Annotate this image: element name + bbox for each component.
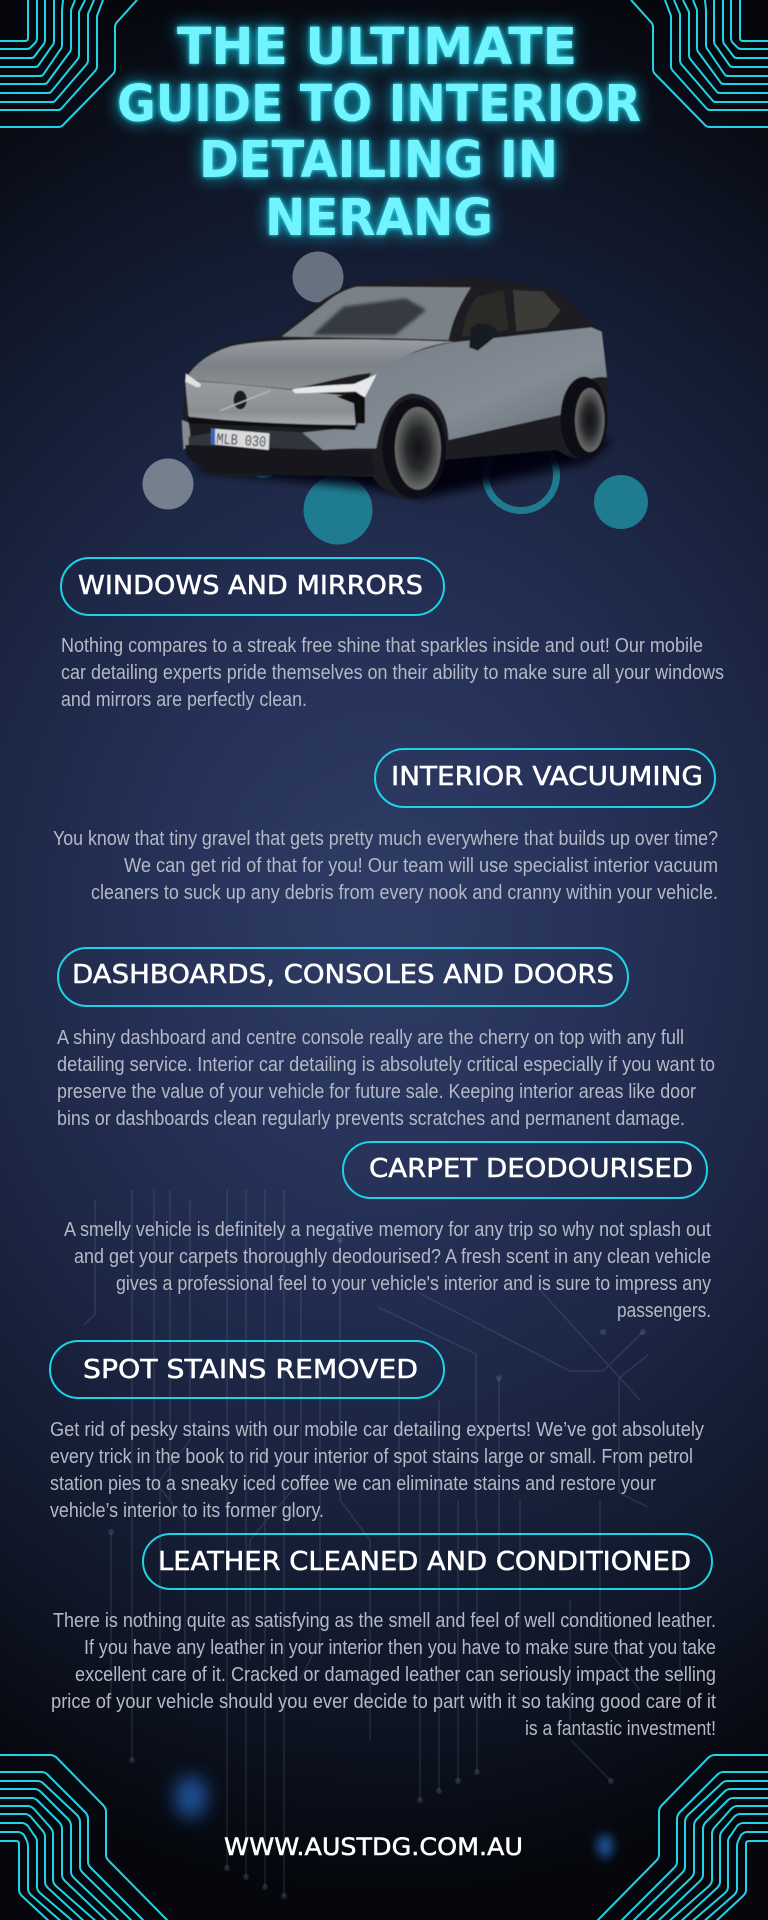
body text: excellent care of it. Cracked or damaged leather can seriously impact the selling [75, 1664, 716, 1686]
panel: spot stains removed [50, 1341, 704, 1522]
panel: dashboards, consoles and doors [57, 948, 715, 1130]
heading pill: SPOT STAINS REMOVED [83, 1355, 418, 1385]
body text: bins or dashboards clean regularly prevents scratches and permanent damage. [57, 1108, 685, 1130]
title: DETAILING IN [199, 131, 558, 190]
body text [61, 635, 724, 711]
body text: A smelly vehicle is definitely a negative memory for any trip so why not splash out [64, 1219, 711, 1241]
body text: gives a professional feel to your vehicle's interior and is sure to impress any [116, 1273, 711, 1295]
body text: We can get rid of that for you! Our team will use specialist interior vacuum [124, 855, 718, 877]
panel: leather cleaned and conditioned [51, 1534, 716, 1740]
body text: every trick in the book to rid your interior of spot stains large or small. From petrol [50, 1446, 693, 1468]
body text: A shiny dashboard and centre console really are the cherry on top with any full [57, 1027, 684, 1049]
heading pill [50, 1341, 444, 1398]
circuit lines: bottom right corner [595, 1755, 768, 1920]
body text [50, 1419, 704, 1522]
title [117, 18, 641, 248]
title: GUIDE TO INTERIOR [117, 75, 641, 134]
panel: windows and mirrors [61, 558, 724, 711]
heading pill: CARPET DEODOURISED [369, 1154, 693, 1184]
body text: and mirrors are perfectly clean. [61, 689, 307, 711]
decorative circles behind the car [142, 252, 648, 544]
body text: and get your carpets thoroughly deodourised? A fresh scent in any clean vehicle [74, 1246, 711, 1268]
car illustration [182, 277, 612, 498]
body text: detailing service. Interior car detailing is absolutely critical especially if you want to [57, 1054, 715, 1076]
body text: price of your vehicle should you ever decide to part with it so taking good care of it [51, 1691, 716, 1713]
title: THE ULTIMATE [177, 18, 577, 77]
title: NERANG [265, 189, 493, 248]
body text [57, 1027, 715, 1130]
circuit lines: top left corner [0, 0, 137, 127]
car body [182, 277, 607, 498]
body text: Nothing compares to a streak free shine that sparkles inside and out! Our mobile [61, 635, 703, 657]
body text: vehicle’s interior to its former glory. [50, 1500, 324, 1522]
car body: MLB 030 [216, 431, 267, 452]
footer website: WWW.AUSTDG.COM.AU [224, 1833, 523, 1861]
panel: carpet deodourised [64, 1142, 711, 1322]
blurred blue glow spots [175, 1776, 613, 1858]
body text: Get rid of pesky stains with our mobile car detailing experts! We’ve got absolutely [50, 1419, 704, 1441]
heading pill [58, 948, 628, 1006]
circuit lines: bottom left corner [0, 1755, 170, 1920]
body text: passengers. [617, 1300, 711, 1322]
body text [51, 1610, 716, 1740]
heading pill [375, 749, 715, 807]
body text: station pies to a sneaky iced coffee we can eliminate stains and restore your [50, 1473, 656, 1495]
car shadow [195, 427, 612, 498]
heading pill [343, 1142, 707, 1198]
heading pill: INTERIOR VACUUMING [391, 762, 703, 792]
heading pill: WINDOWS AND MIRRORS [78, 571, 423, 601]
circuit lines: top right corner [631, 0, 768, 127]
heading pill [143, 1534, 712, 1589]
heading pill [61, 558, 444, 615]
body text [64, 1219, 711, 1322]
body text: preserve the value of your vehicle for future sale. Keeping interior areas like door [57, 1081, 696, 1103]
body text [53, 828, 718, 904]
heading pill: LEATHER CLEANED AND CONDITIONED [158, 1547, 691, 1577]
background circuit pattern [84, 1190, 680, 1899]
body text: is a fantastic investment! [525, 1718, 716, 1740]
panel: interior vacuuming [53, 749, 718, 904]
heading pill: DASHBOARDS, CONSOLES AND DOORS [72, 960, 614, 990]
